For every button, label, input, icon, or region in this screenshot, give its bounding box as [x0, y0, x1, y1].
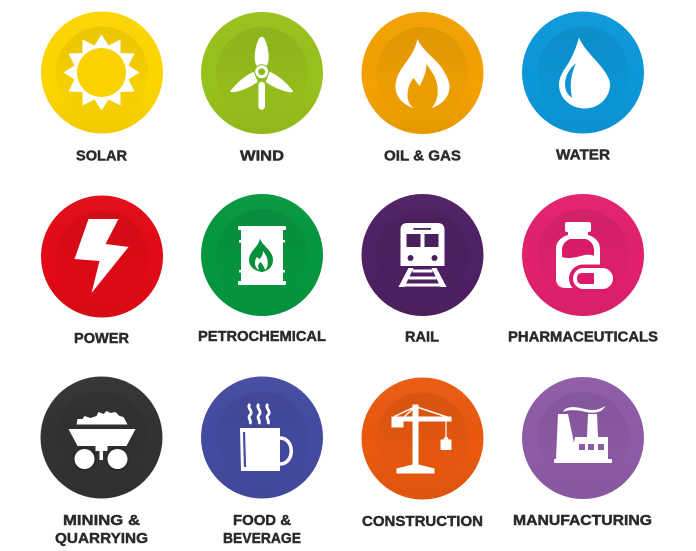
panel: solar [41, 12, 163, 164]
panel: mining and quarrying [40, 376, 162, 547]
label: food and beverage: FOOD & [233, 513, 292, 529]
badge: solar [41, 12, 163, 134]
label: mining and quarrying: MINING & [63, 513, 141, 529]
panel: construction [362, 378, 484, 530]
label: solar: SOLAR [76, 148, 128, 164]
label: power: POWER [74, 331, 130, 347]
icon: flame [396, 39, 450, 108]
badge: water [522, 12, 644, 134]
badge: oil and gas [362, 12, 484, 134]
icon: wind turbine [230, 37, 293, 110]
icon: train [398, 223, 446, 287]
panel: water [522, 12, 644, 164]
badge: rail [362, 194, 484, 316]
label: rail: RAIL [405, 330, 439, 346]
panel: manufacturing [513, 377, 652, 529]
badge: petrochemical [201, 194, 323, 316]
icon: steaming mug [240, 404, 291, 471]
label: wind: WIND [240, 148, 284, 164]
panel: rail [362, 194, 484, 346]
icon: lightning bolt [74, 219, 128, 293]
label: petrochemical: PETROCHEMICAL [198, 329, 326, 345]
panel: wind [201, 12, 323, 164]
label: construction: CONSTRUCTION [362, 514, 483, 530]
badge: construction [362, 378, 484, 500]
label: food and beverage: BEVERAGE [223, 531, 301, 547]
label: oil and gas: OIL & GAS [384, 148, 461, 164]
badge: manufacturing [522, 377, 644, 499]
icon: water drop [559, 38, 610, 108]
icon: sun [64, 34, 140, 110]
panel: oil and gas [362, 12, 484, 164]
badge: wind [201, 12, 323, 134]
icon: medicine bottle and pill [556, 222, 617, 292]
label: mining and quarrying: QUARRYING [55, 531, 148, 547]
badge: pharmaceuticals [522, 194, 644, 316]
panel: food and beverage [201, 376, 323, 547]
label: mining and quarrying [55, 513, 148, 547]
icon: coal cart [68, 411, 136, 471]
panel: petrochemical [198, 194, 326, 345]
badge: mining and quarrying [40, 376, 162, 498]
icon: oil barrel with flame [238, 226, 286, 285]
label: food and beverage [223, 513, 301, 547]
panel: pharmaceuticals [508, 194, 658, 346]
icon: tower crane [392, 404, 452, 474]
label: water: WATER [556, 148, 611, 164]
badge: power [41, 196, 163, 318]
badge: food and beverage [201, 376, 323, 498]
panel: power [41, 196, 163, 347]
label: manufacturing: MANUFACTURING [513, 513, 652, 529]
icon: factory [554, 406, 612, 463]
label: pharmaceuticals: PHARMACEUTICALS [508, 330, 658, 346]
